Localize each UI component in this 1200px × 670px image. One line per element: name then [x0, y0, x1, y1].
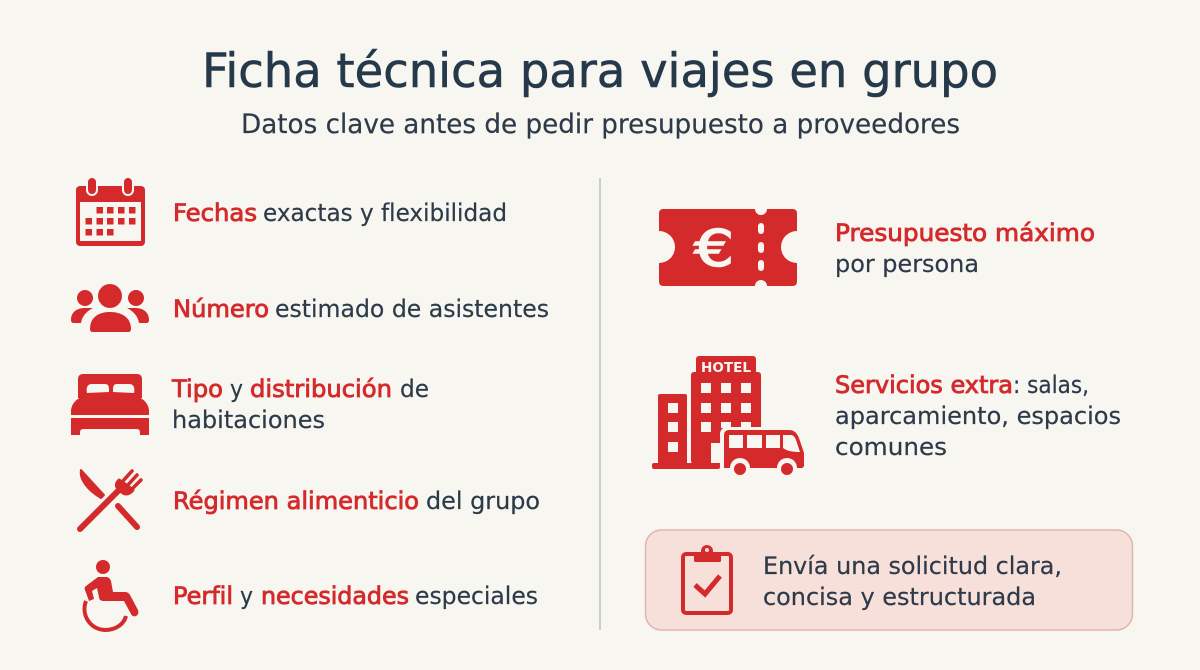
label: presupuesto: Presupuesto máximo — [835, 219, 1095, 247]
label: fechas: Fechas — [173, 199, 257, 227]
label: tipo: habitaciones — [172, 406, 325, 434]
icon: knife and fork — [80, 470, 141, 529]
subtitle: Datos clave antes de pedir presupuesto a proveedores — [241, 109, 960, 140]
label: tipo: y — [230, 375, 243, 403]
callout — [646, 530, 1132, 630]
label: servicios: aparcamiento, espacios — [835, 402, 1121, 430]
title: Ficha técnica para viajes en grupo — [202, 44, 998, 99]
callout text — [763, 552, 1062, 611]
label: tipo — [171, 375, 429, 434]
label: perfil: y — [240, 582, 253, 610]
label: presupuesto — [835, 219, 1095, 278]
icon: clipboard check — [683, 545, 731, 613]
label: servicios: Servicios extra — [835, 371, 1013, 399]
label: tipo: de — [400, 375, 429, 403]
label: regimen — [173, 487, 540, 515]
icon: euro ticket — [659, 209, 797, 286]
label: tipo: Tipo — [171, 375, 223, 403]
label: perfil: Perfil — [173, 582, 233, 610]
label: regimen: Régimen alimenticio — [173, 487, 419, 515]
icon: hotel and bus: HOTEL — [701, 361, 751, 376]
label: numero: estimado de asistentes — [275, 295, 549, 323]
label: servicios: : salas, — [1013, 371, 1089, 399]
icon: euro ticket: € — [694, 220, 734, 278]
icon: hotel and bus — [652, 356, 808, 478]
icon: bed — [71, 374, 149, 435]
label: perfil: especiales — [415, 582, 538, 610]
label: servicios — [835, 371, 1121, 461]
callout text: Envía una solicitud clara, — [763, 552, 1062, 580]
label: perfil — [173, 582, 538, 610]
label: tipo: distribución — [250, 375, 392, 403]
label: numero: Número — [173, 295, 269, 323]
icon: calendar — [76, 177, 145, 246]
label: servicios: comunes — [835, 433, 947, 461]
label: presupuesto: por persona — [835, 250, 979, 278]
icon: people — [71, 284, 149, 332]
label: regimen: del grupo — [426, 487, 540, 515]
icon: wheelchair — [85, 560, 138, 630]
label: perfil: necesidades — [261, 582, 409, 610]
callout text: concisa y estructurada — [763, 583, 1036, 611]
label: fechas: exactas y flexibilidad — [263, 199, 507, 227]
